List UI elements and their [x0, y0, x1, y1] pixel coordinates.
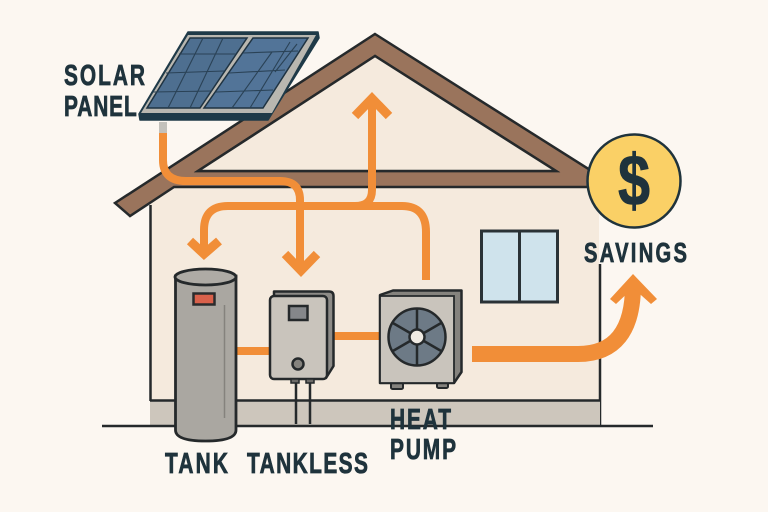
label: heat pump: [390, 404, 456, 466]
label: tank: TANK: [165, 448, 228, 480]
label: tankless: TANKLESS: [247, 448, 368, 480]
savings coin: [588, 134, 680, 228]
orange flow: solar to tankless: [163, 122, 317, 270]
tankless water heater: [270, 292, 334, 424]
tank water heater: [175, 269, 236, 441]
ground and foundation: [102, 400, 653, 426]
solar panel: [139, 32, 319, 120]
savings arrow: [472, 274, 657, 354]
label: solar panel: [64, 60, 145, 123]
orange flow: heat pump branches: [190, 98, 426, 280]
heat pump unit: [380, 290, 462, 389]
label: heat pump: PUMP: [390, 434, 456, 466]
label: savings: SAVINGS: [584, 238, 687, 269]
label: solar panel: PANEL: [64, 91, 137, 123]
fan: [388, 308, 446, 366]
house wall: [150, 187, 600, 425]
label: heat pump: HEAT: [390, 404, 451, 436]
label: solar panel: SOLAR: [64, 60, 145, 92]
dollar sign: $: [618, 140, 650, 220]
window: [482, 231, 558, 302]
roof: [115, 34, 590, 216]
connector pipes: [236, 332, 380, 355]
